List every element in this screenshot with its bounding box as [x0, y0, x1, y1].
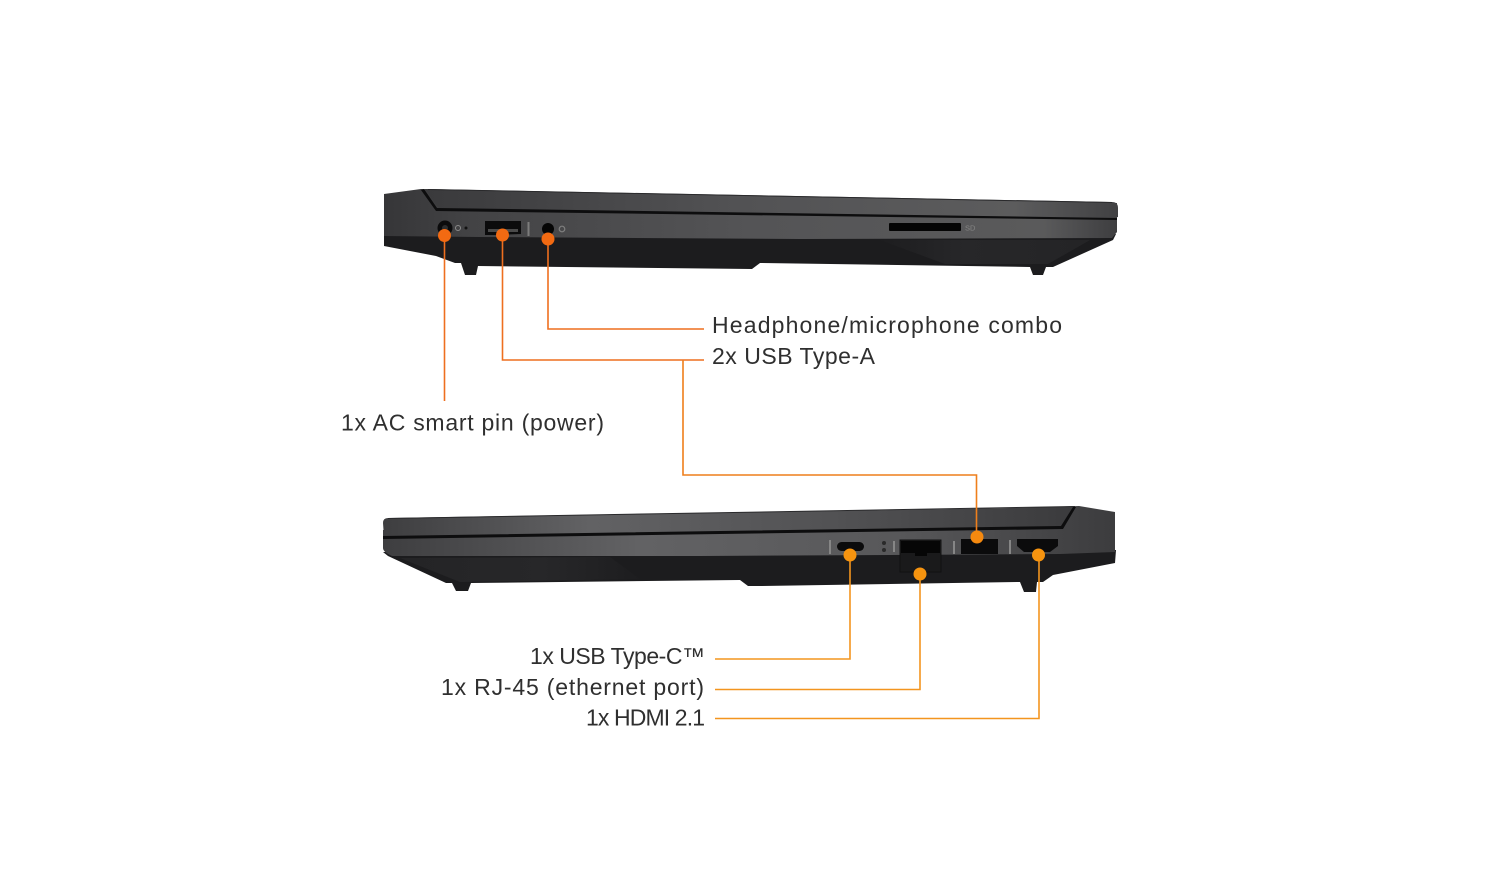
base dark underside: [383, 550, 1116, 592]
laptop: left side view: [384, 189, 1118, 275]
leader line: headphone combo: [542, 232, 704, 329]
label: headphone/microphone combo: Headphone/microphone combo: [712, 312, 1062, 338]
port: HDMI: [1009, 539, 1058, 554]
port: USB Type-A: [953, 539, 998, 554]
hinge gap line: [383, 507, 1076, 539]
port: RJ-45 ethernet: [882, 540, 941, 572]
port: USB Type-C: [829, 540, 864, 554]
leader line: USB Type-A, left side: [496, 228, 704, 360]
base silver band: [383, 506, 1115, 556]
port: USB Type-A: [485, 221, 530, 236]
leader line: HDMI: [715, 548, 1045, 718]
port: SD card slot: [889, 223, 976, 232]
laptop: right side view: [383, 506, 1116, 592]
label: HDMI: 1x HDMI 2.1: [586, 704, 705, 730]
lid: [425, 189, 1118, 218]
leader line: RJ-45: [715, 568, 926, 690]
label: USB Type-A: 2x USB Type-A: [712, 343, 876, 369]
label: AC smart pin: 1x AC smart pin (power): [341, 410, 604, 436]
base dark underside: [384, 234, 1116, 275]
leader line: AC smart pin: [438, 229, 451, 401]
label: USB Type-C: 1x USB Type-C™: [530, 643, 705, 669]
port: AC smart pin: [438, 220, 468, 236]
port: headphone jack: [542, 223, 565, 235]
label: RJ-45: 1x RJ-45 (ethernet port): [441, 674, 704, 700]
leader line: USB Type-C: [715, 548, 856, 659]
speaker texture: [400, 557, 640, 582]
lid: [383, 507, 1073, 537]
top edge highlight: [388, 506, 1075, 519]
port: SD card slot: SD: [965, 224, 976, 232]
speaker texture: [880, 240, 1090, 264]
top edge highlight: [428, 189, 1112, 203]
base silver band: [384, 189, 1117, 239]
hinge gap line: [421, 189, 1117, 220]
leader line: USB Type-A, right side: [683, 360, 984, 544]
